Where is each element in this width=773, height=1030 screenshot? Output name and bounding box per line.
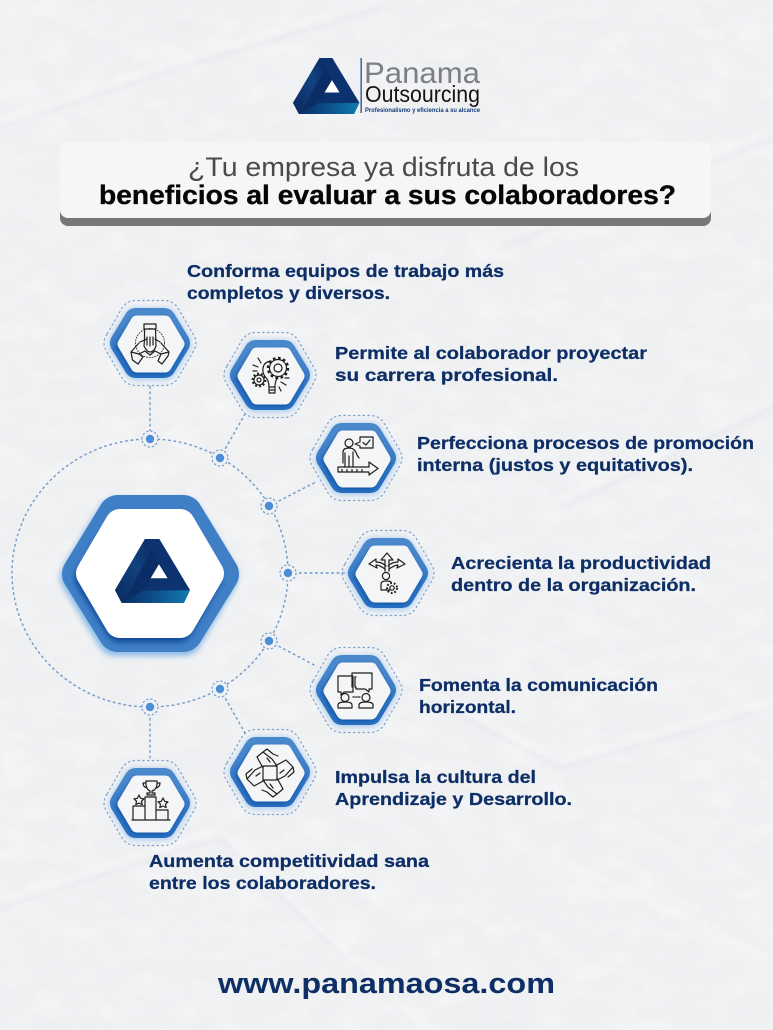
icon: lightbulb with gears [253, 358, 289, 393]
benefit 3: promocion: interna (justos y equitativos). [417, 455, 693, 475]
benefit 6: aprendizaje: Aprendizaje y Desarrollo. [335, 789, 572, 809]
benefit 4: productividad [342, 530, 711, 616]
banner shadow [60, 160, 711, 226]
benefit 7: competitividad [104, 760, 429, 893]
benefit 2: carrera: su carrera profesional. [335, 365, 558, 385]
website footer: www.panamaosa.com [217, 968, 555, 1000]
logo wordmark: Outsourcing: Outsourcing [365, 81, 480, 107]
benefit 1: equipos: completos y diversos. [187, 283, 390, 303]
hexagon 1 [104, 300, 196, 386]
hexagon 7 [104, 760, 196, 846]
benefit 3: promocion [310, 416, 754, 500]
central hexagon with logo [80, 515, 219, 636]
hexagon 6 [224, 730, 316, 814]
benefit 5: comunicacion [310, 648, 658, 732]
hexagon 3 [310, 416, 402, 500]
logo divider [360, 58, 362, 113]
benefit 5: comunicacion: horizontal. [419, 697, 516, 717]
hexagon 4 [342, 530, 434, 616]
icon: podium with trophy and stars [132, 781, 170, 820]
hexagon 5 [310, 648, 402, 732]
connector network [12, 386, 348, 761]
benefit 4: productividad: dentro de la organización. [451, 575, 696, 595]
icon: two people with chat bubbles [338, 673, 373, 708]
title line 1: ¿Tu empresa ya disfruta de los [188, 152, 579, 182]
benefit 1: equipos [104, 261, 504, 386]
icon: hands stacked [131, 324, 169, 364]
node dots [142, 431, 296, 715]
benefit 2 text: Permite al colaborador proyectar [335, 343, 647, 363]
central logo mark [115, 539, 190, 603]
benefit 4 text: Acrecienta la productividad [451, 553, 711, 573]
benefit 6: aprendizaje [224, 730, 572, 814]
benefit 5 text: Fomenta la comunicación [419, 675, 658, 695]
benefit 3 text: Perfecciona procesos de promoción [417, 433, 754, 453]
benefit 1 text: Conforma equipos de trabajo más [187, 261, 504, 281]
icon: arrows with person and gear [369, 553, 405, 593]
logo tagline: Profesionalismo y eficiencia a su alcance [365, 107, 480, 114]
benefit 6 text: Impulsa la cultura del [335, 767, 536, 787]
banner panel [60, 142, 711, 218]
title line 2: beneficios al evaluar a sus colaboradores? [99, 180, 676, 210]
logo mark: impossible triangle [293, 58, 359, 114]
logo: Panama Outsourcing [293, 57, 480, 114]
logo wordmark: Panama: Panama [364, 57, 480, 90]
hexagon 2 [224, 332, 316, 418]
title banner [60, 142, 711, 226]
benefit 7 text: Aumenta competitividad sana [149, 851, 429, 871]
benefit 2: carrera [224, 332, 647, 418]
benefit 7: competitividad: entre los colaboradores. [149, 873, 376, 893]
icon: four interlocked hands [246, 749, 294, 797]
icon: person on ruler with speech bubble [338, 437, 378, 475]
